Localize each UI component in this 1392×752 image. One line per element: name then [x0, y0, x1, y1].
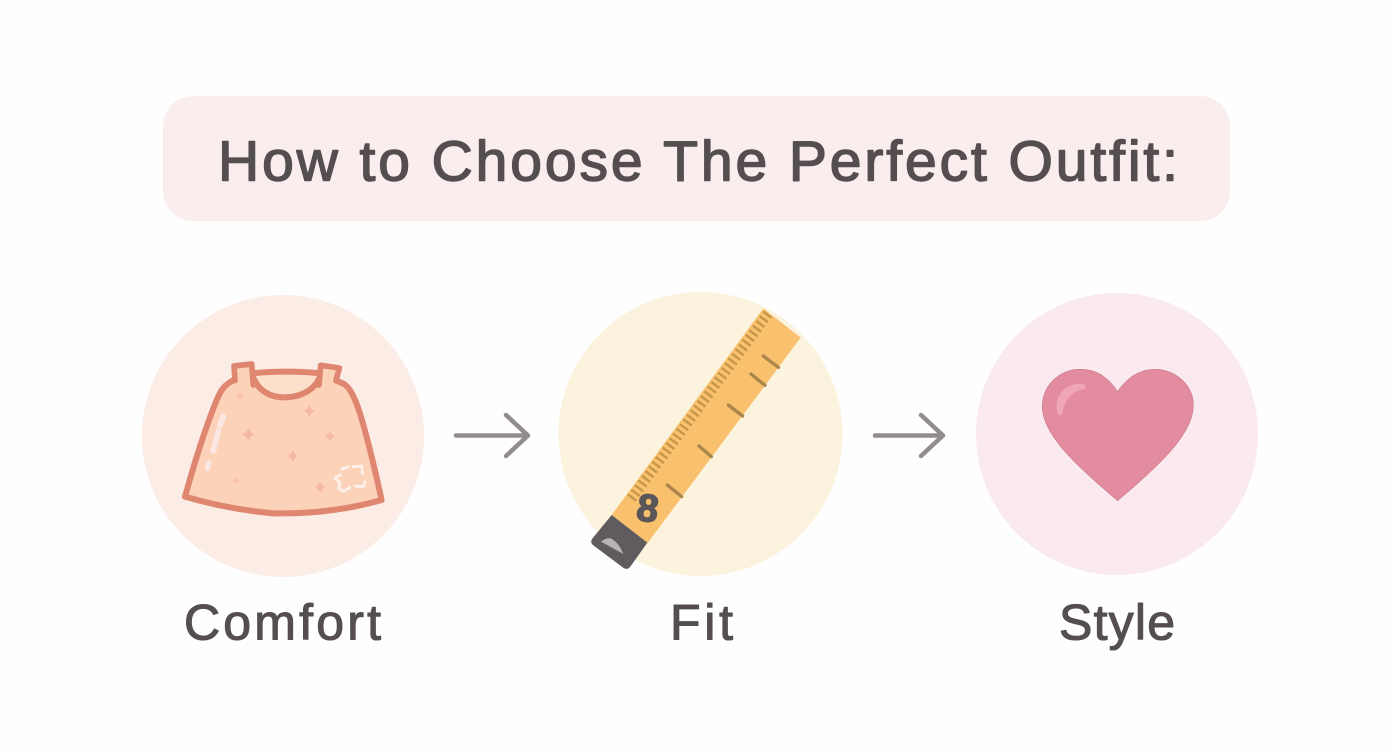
arrow: fit to style — [875, 415, 943, 456]
icon: measuring tape — [591, 308, 801, 569]
title banner — [163, 96, 1230, 221]
icon: heart — [1042, 369, 1193, 501]
icon: soft top garment — [185, 364, 382, 513]
panel: comfort — [142, 295, 424, 650]
label: style: Style — [1059, 594, 1175, 650]
panel: style — [976, 293, 1258, 650]
arrow: comfort to fit — [456, 415, 528, 456]
label: comfort: Comfort — [184, 594, 381, 650]
number on tape: 8 — [634, 486, 661, 532]
label: fit: Fit — [670, 594, 733, 650]
panel: fit — [558, 292, 842, 650]
title text: How to Choose The Perfect Outfit: — [218, 130, 1178, 194]
